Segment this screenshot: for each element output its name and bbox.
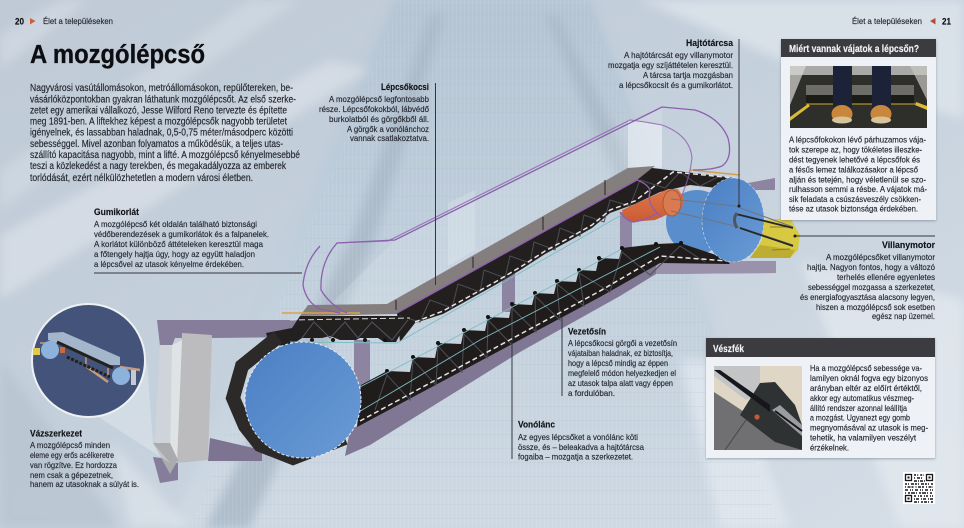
panel heading: Miért vannak vájatok a lépcsőn? [789, 44, 919, 55]
label: Gumikorlát: a lépcsővel az utasok kényelme érdekében. [94, 259, 244, 269]
panel text: arányban eltér az előírt értéktől, [810, 383, 922, 393]
label: Vázszerkezet [30, 428, 139, 489]
label: Villanymotor: sebességgel mozgassa a szerkezetet, [808, 282, 935, 292]
intro text block: igényelnek, és lassabban haladnak, 0,5-0,75 méter/másodperc közötti [30, 128, 293, 138]
label: Gumikorlát: A mozgólépcső két oldalán található biztonsági [94, 219, 257, 229]
panel text [789, 134, 927, 214]
guide rails [290, 197, 660, 413]
panel text: tehetik, ha valamilyen veszélyt [810, 432, 917, 442]
label: Villanymotor: Villanymotor [882, 239, 935, 250]
label: Vezetősín: hogy a lépcső mindig az éppen [568, 358, 668, 368]
label: Vonólánc [512, 340, 644, 462]
escalator cutaway illustration [153, 107, 800, 483]
rear drive wheel [666, 190, 728, 254]
step rollers [310, 241, 683, 373]
panel heading: Vészfék [713, 344, 744, 355]
label: Gumikorlát: A korlátot különböző áttételeken keresztül maga [94, 239, 263, 249]
label: Vázszerkezet: Vázszerkezet [30, 428, 82, 438]
label: Vezetősín: vájataiban haladnak, ez biztosítja, [568, 348, 673, 358]
intro text block: zetet egy amerikai vállalkozó, Jesse Wilford Reno tervezte és építette [30, 106, 287, 116]
intro text block: meg 1891-ben. A liftekhez képest a mozgólépcsők nagyobb területet [30, 116, 287, 128]
label: Vezetősín: A lépcsőkocsi görgői a vezetősín [568, 338, 677, 348]
QR code [903, 472, 935, 504]
title: A mozgólépcső [30, 41, 205, 69]
label: Gumikorlát: Gumikorlát [94, 206, 139, 217]
panel text: dést tegyenek lehetővé a lépcsőfok és [789, 154, 921, 164]
photo: brake button [714, 366, 802, 450]
steel frame [153, 178, 776, 483]
upper truss run [397, 168, 740, 342]
label: Villanymotor: terhelés ellenére egyenletes [837, 272, 936, 282]
yellow electric motor [750, 218, 800, 258]
label: Vezetősín: megfelelő módon helyezkedjen el [568, 368, 676, 378]
label: Lépcsőkocsi: burkolatból és görgőkből áll. [329, 114, 429, 124]
panel text: rulhasson semmi a résbe. A vájatok má- [789, 184, 927, 194]
intro text block: sebességgel. Mivel azonban folyamatos a működésük, a teljes utas- [30, 139, 283, 150]
panel text: tok szerepe az, hogy tökéletes illeszke- [789, 144, 922, 154]
panel text: érzékelnek. [810, 442, 849, 452]
lower landing steps [266, 313, 410, 346]
intro text block: Nagyvárosi vasútállomásokon, metróállomásokon, repülőtereken, be- [30, 83, 293, 94]
label: Gumikorlát [94, 206, 302, 273]
label: Gumikorlát: védőberendezések a gumikorlátok és a falpanelek. [94, 229, 269, 239]
handrail [303, 107, 730, 313]
label: Vázszerkezet: eleme egy erős acélkeretre [30, 450, 114, 460]
panel heading [706, 338, 935, 357]
label: Lépcsőkocsi: A mozgólépcső legfontosabb [329, 94, 429, 104]
drive belt and axle [671, 199, 793, 246]
label: Hajtótárcsa: mozgatja egy szíjáttételen keresztül. [608, 60, 733, 70]
label: Lépcsőkocsi: Lépcsőkocsi [381, 81, 429, 92]
panel: why grooves [781, 39, 936, 220]
label: Hajtótárcsa: A tárcsa tartja mozgásban [643, 70, 733, 80]
grey truss cover [300, 166, 655, 316]
label: Gumikorlát: a főtengely hajtja úgy, hogy az együtt haladjon [94, 249, 255, 259]
panel text: tése az utasok biztonsága érdekében. [789, 204, 918, 214]
label: Vonólánc: Vonólánc [518, 418, 555, 430]
label: Lépcsőkocsi: része. Lépcsőfokokból, lábvédő [319, 104, 429, 114]
label: Vonólánc: össze, és – beleakadva a hajtótárcsa [518, 442, 644, 452]
drive wheel [702, 178, 764, 262]
intro text block: vásárlóközpontokban gyakran láthatunk mozgólépcsőt. Az első szerke- [30, 94, 296, 106]
label: Villanymotor [794, 234, 936, 321]
label: Vázszerkezet: nem csak a gépezetnek, [30, 470, 113, 480]
label: Hajtótárcsa: a lépcsőkocsit és a gumikorlátot. [619, 80, 733, 90]
label: Villanymotor: A mozgólépcsőket villanymotor [826, 252, 935, 262]
label: Vázszerkezet: A mozgólépcső minden [30, 440, 110, 450]
page header left: Élet a településeken [43, 16, 113, 26]
label: Hajtótárcsa: A hajtótárcsát egy villanymotor [624, 50, 733, 60]
panel heading [781, 39, 936, 57]
page header left [15, 16, 113, 26]
intro text block [30, 83, 300, 184]
panel text: megnyomásával az utasok is meg- [810, 422, 928, 432]
label: Vezetősín: az utasok talpa alatt vagy éppen [568, 378, 673, 388]
panel text: Ha a mozgólépcső sebessége va- [810, 363, 922, 373]
label: Lépcsőkocsi: vannak csatlakoztatva. [350, 133, 429, 143]
inset callout cone [100, 362, 170, 463]
label: Vázszerkezet: hanem az utasoknak a súlyát is. [30, 479, 139, 489]
label: Vázszerkezet: van rögzítve. Ez hordozza [30, 460, 117, 470]
inset: frame overview [32, 304, 145, 417]
panel text: állító rendszer azonnal leállítja [810, 403, 907, 413]
label: Lépcsőkocsi: A görgők a vonólánchoz [347, 124, 429, 134]
balustrade glass and landing [330, 107, 662, 305]
panel: emergency brake [706, 338, 935, 458]
lower wheel [245, 342, 361, 458]
label: Villanymotor: hiszen a mozgólépcső sok esetben [816, 302, 935, 312]
lower truss run [357, 243, 730, 427]
label: Vezetősín: Vezetősín [568, 326, 606, 336]
panel text [810, 363, 929, 452]
concrete column [153, 333, 212, 474]
intro text block: szállító kapacitása nagyobb, mint a lifté. A mozgólépcső kényelmesebbé [30, 150, 300, 161]
page header right: Élet a településeken [852, 16, 922, 26]
label: Villanymotor: egész nap üzemel. [872, 311, 935, 321]
panel text: akkor egy automatikus vészmeg- [810, 393, 914, 403]
page header left: 20 [15, 16, 24, 26]
panel text: a fésűs lemez találkozásakor a lépcső [789, 164, 918, 174]
photo: shoes on escalator [790, 66, 927, 128]
label: Villanymotor: és energiafogyasztása alacsony legyen, [800, 292, 935, 302]
label: Lépcsőkocsi [319, 81, 436, 285]
label: Hajtótárcsa [608, 37, 740, 208]
panel text: alján és tetején, hogy véletlenül se szo- [789, 174, 926, 184]
red gearbox motor [622, 189, 684, 222]
label: Hajtótárcsa: Hajtótárcsa [686, 37, 734, 48]
intro text block: teszi a közlekedést a nagy terekben, és megakadályozza az emberek [30, 161, 286, 172]
panel text: a mozgást. Ugyanezt egy gomb [810, 412, 910, 422]
panel text: lamilyen oknál fogva egy bizonyos [810, 373, 929, 383]
label: Vonólánc: Az egyes lépcsőket a vonólánc köti [518, 432, 638, 442]
panel text: A lépcsőfokokon lévő párhuzamos vája- [789, 134, 926, 144]
panel text: sik feladata a csúszásveszély csökken- [789, 194, 921, 204]
chain wrap around lower wheel [233, 337, 345, 458]
intro text block: torlódását, ezért nélkülözhetetlen a modern városi életben. [30, 173, 253, 184]
label: Vezetősín [562, 317, 677, 398]
label: Villanymotor: hajtja. Nagyon fontos, hogy a változó [807, 262, 935, 272]
label: Vonólánc: fogaiba – mozgatja a szerkezetet. [518, 452, 633, 462]
label: Vezetősín: a fordulóban. [568, 388, 615, 398]
page header right: 21 [942, 16, 951, 26]
